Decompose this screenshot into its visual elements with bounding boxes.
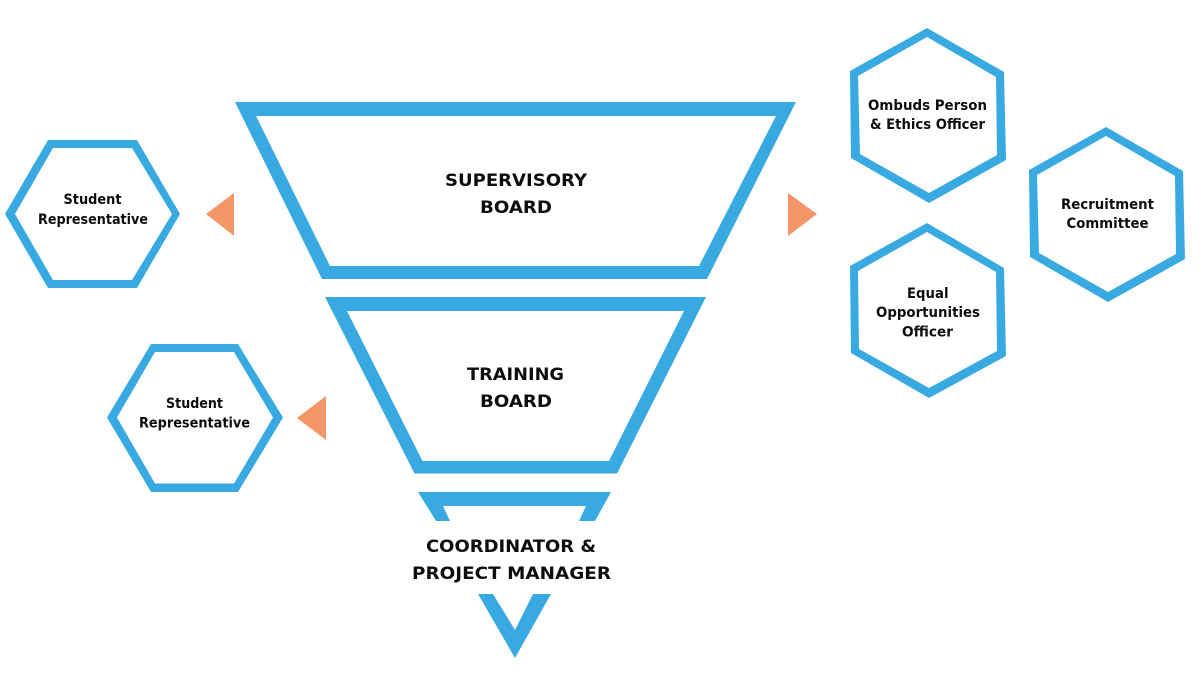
hexagon: equal opportunities officer: Officer xyxy=(902,324,953,340)
icon: arrow to student representative, supervisory board xyxy=(206,193,234,236)
panel: supervisory board: BOARD xyxy=(480,198,552,217)
hexagon: student representative, training board xyxy=(107,344,283,492)
panel: supervisory board: SUPERVISORY xyxy=(445,171,588,190)
icon: arrow to right-hand officers xyxy=(788,193,817,236)
hexagon: recruitment committee: Recruitment xyxy=(1061,197,1154,213)
panel: training board: BOARD xyxy=(480,392,552,411)
hexagon: recruitment committee xyxy=(1029,127,1185,302)
hexagon: ombuds person and ethics officer: & Ethics Officer xyxy=(870,117,985,133)
panel: training board xyxy=(325,297,706,474)
hexagon: student representative, training board: Student xyxy=(166,396,223,412)
hexagon: student representative, supervisory board: Representative xyxy=(38,212,148,228)
hexagon: ombuds person and ethics officer: Ombuds Person xyxy=(868,98,987,114)
hexagon: equal opportunities officer: Equal xyxy=(907,286,948,302)
panel: training board: TRAINING xyxy=(467,365,564,384)
hexagon: equal opportunities officer: Opportunities xyxy=(876,305,980,321)
hexagon: equal opportunities officer xyxy=(850,223,1006,398)
hexagon: student representative, training board: Representative xyxy=(139,416,250,432)
hexagon: ombuds person and ethics officer xyxy=(850,28,1006,203)
hexagon: student representative, supervisory board: Student xyxy=(64,192,122,208)
hexagon: recruitment committee: Committee xyxy=(1066,216,1148,232)
panel: coordinator and project manager xyxy=(412,492,611,658)
icon: arrow to student representative, training board xyxy=(297,396,326,440)
panel: coordinator and project manager: COORDINATOR & xyxy=(426,537,596,556)
hexagon: student representative, supervisory board xyxy=(5,140,180,288)
panel: coordinator and project manager: PROJECT MANAGER xyxy=(412,564,611,583)
panel: supervisory board xyxy=(235,102,796,279)
